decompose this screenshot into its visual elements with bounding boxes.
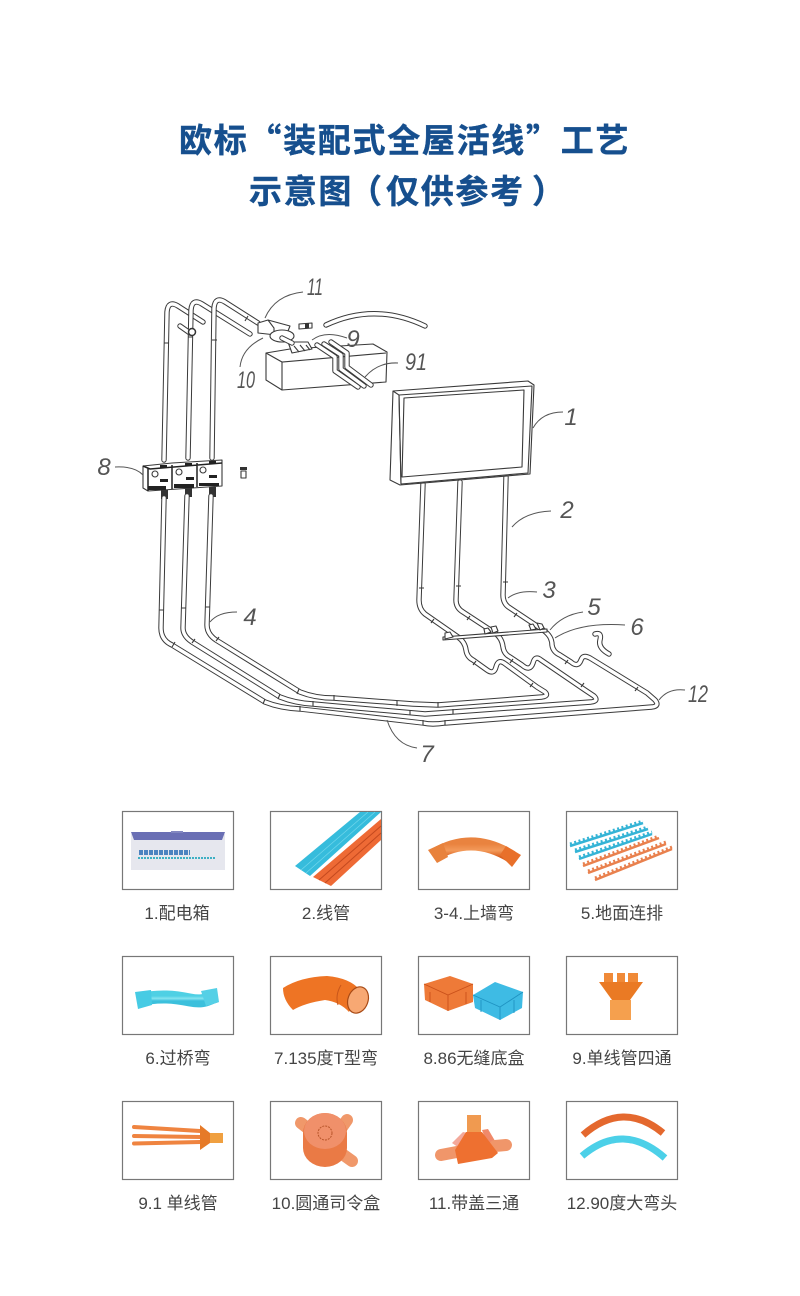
item 12: 90 degree bends: 12.90度大弯头 bbox=[567, 1194, 677, 1213]
item 10: round junction box bbox=[270, 1102, 382, 1213]
item 12: 90 degree bends bbox=[566, 1102, 678, 1213]
item 11: covered tee: 11.带盖三通 bbox=[429, 1194, 519, 1213]
item 6: bridge bend bbox=[122, 956, 234, 1068]
leaders and part numbers: 11 bbox=[307, 274, 323, 301]
item 7: 135 degree bend: 7.135度T型弯 bbox=[274, 1049, 378, 1068]
loose bridge bend bbox=[595, 634, 609, 654]
item 3-4: wall bend bbox=[418, 812, 530, 923]
item 6: bridge bend: 6.过桥弯 bbox=[145, 1049, 211, 1068]
leaders and part numbers: 6 bbox=[630, 614, 644, 641]
leaders and part numbers: 4 bbox=[243, 604, 257, 631]
item 3-4: wall bend: 3-4.上墙弯 bbox=[434, 904, 514, 923]
leaders and part numbers: 12 bbox=[688, 681, 708, 708]
lower conduits bbox=[159, 477, 657, 725]
tee and round junction box bbox=[258, 320, 312, 343]
title: ） bbox=[532, 165, 567, 213]
item 2: conduit: 2.线管 bbox=[302, 904, 350, 923]
item 1: distribution box bbox=[122, 812, 234, 923]
loose screw part bbox=[240, 467, 247, 478]
title: 示意图 bbox=[249, 165, 353, 213]
leaders and part numbers: 10 bbox=[237, 367, 255, 394]
leaders and part numbers bbox=[97, 274, 708, 768]
leaders and part numbers: 3 bbox=[542, 577, 556, 604]
ceiling block with four-way fitting bbox=[266, 342, 387, 390]
leaders and part numbers: 1 bbox=[564, 404, 578, 431]
title bbox=[179, 114, 630, 213]
loose conduit bbox=[326, 314, 425, 326]
ground connection bar and clips bbox=[443, 623, 547, 640]
title: （ bbox=[349, 165, 384, 213]
exploded installation diagram bbox=[97, 274, 708, 768]
item 9: four-way fitting: 9.单线管四通 bbox=[572, 1049, 672, 1068]
distribution box bbox=[390, 381, 534, 485]
item 2: conduit bbox=[270, 812, 382, 923]
item 7: 135 degree bend bbox=[270, 956, 382, 1068]
item 1: distribution box: 1.配电箱 bbox=[144, 904, 210, 923]
wall boxes bbox=[143, 460, 222, 491]
title: 欧标“装配式全屋活线”工艺 bbox=[179, 114, 630, 162]
item 9.1: single conduit: 9.1 单线管 bbox=[138, 1194, 218, 1213]
item 9: four-way fitting bbox=[566, 956, 678, 1068]
upper left conduits bbox=[164, 300, 258, 460]
stubs below wall boxes bbox=[161, 487, 216, 499]
item 8: seamless bottom boxes: 8.86无缝底盒 bbox=[423, 1049, 525, 1068]
item 9.1: single conduit bbox=[122, 1102, 234, 1213]
item 5: ground connection strips: 5.地面连排 bbox=[581, 904, 663, 923]
leaders and part numbers: 7 bbox=[420, 741, 435, 768]
item 5: ground connection strips bbox=[566, 812, 678, 923]
leaders and part numbers: 2 bbox=[559, 497, 574, 524]
item 11: covered tee bbox=[418, 1102, 530, 1213]
item 8: seamless bottom boxes bbox=[418, 956, 530, 1068]
item 10: round junction box: 10.圆通司令盒 bbox=[272, 1194, 380, 1213]
leaders and part numbers: 8 bbox=[97, 454, 111, 481]
leaders and part numbers: 9 bbox=[346, 326, 360, 353]
leaders and part numbers: 91 bbox=[405, 349, 427, 376]
title: 仅供参考 bbox=[386, 165, 525, 213]
leaders and part numbers: 5 bbox=[587, 594, 601, 621]
